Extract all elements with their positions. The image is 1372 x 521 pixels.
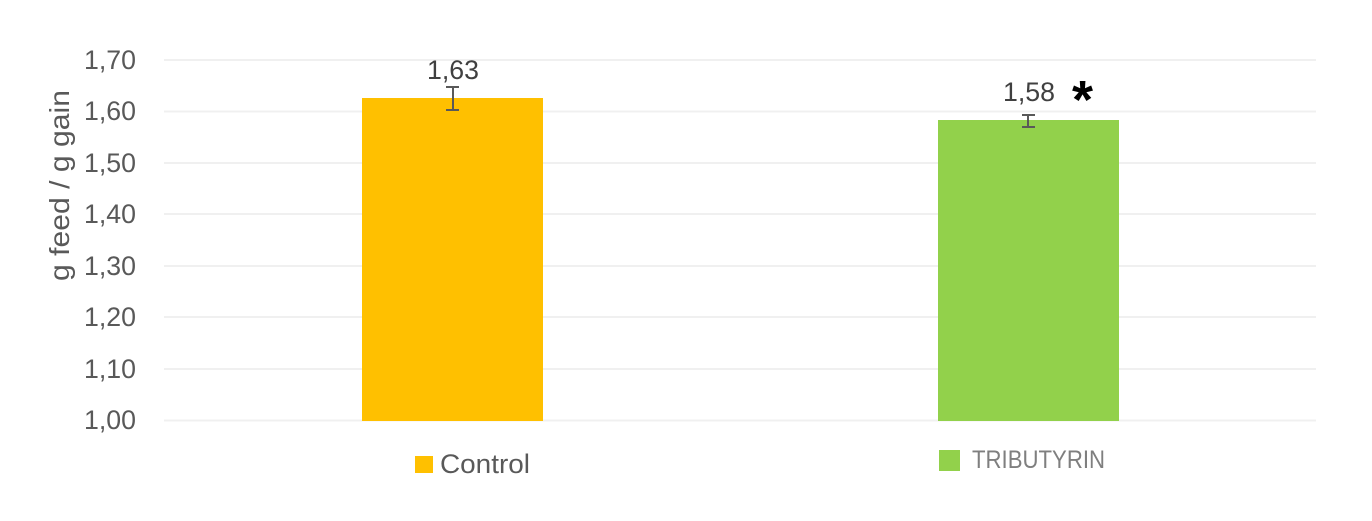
bar: Tributyrin <box>938 120 1119 421</box>
error bar: Control <box>446 87 459 110</box>
y axis tick labels: 1,20 <box>84 302 136 332</box>
error bar: Tributyrin <box>1022 115 1035 127</box>
significance asterisk: * <box>1072 70 1093 130</box>
y axis tick labels: 1,00 <box>84 405 136 435</box>
y axis tick labels: 1,40 <box>84 199 136 229</box>
y axis tick labels: 1,70 <box>84 45 136 75</box>
y axis tick labels: 1,60 <box>84 96 136 126</box>
y axis title: g feed / g gain <box>44 90 75 281</box>
y axis tick labels: 1,30 <box>84 251 136 281</box>
legend: Tributyrin: TRIBUTYRIN <box>972 446 1105 474</box>
y axis tick labels: 1,50 <box>84 148 136 178</box>
legend: Control: Control <box>440 449 530 479</box>
value label: Tributyrin: 1,58 <box>1003 77 1055 107</box>
y axis tick labels <box>84 45 136 435</box>
y axis tick labels: 1,10 <box>84 354 136 384</box>
value label: Control: 1,63 <box>427 55 479 85</box>
bar: Control <box>362 98 543 421</box>
